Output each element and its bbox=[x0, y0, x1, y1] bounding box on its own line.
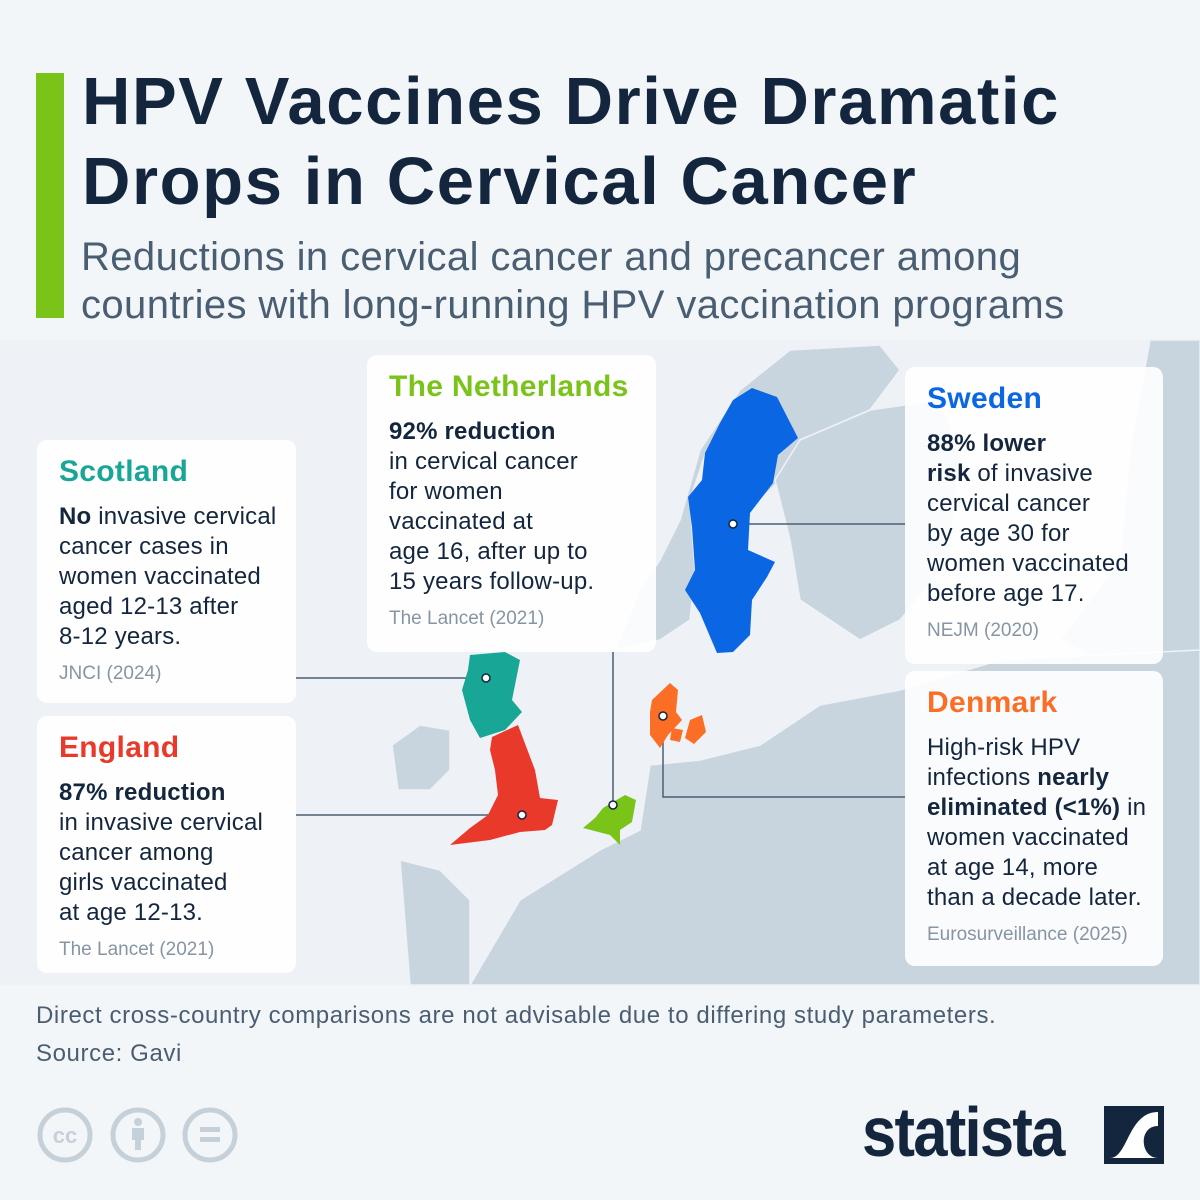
title accent bar bbox=[36, 73, 64, 318]
map: Scotland bbox=[462, 652, 522, 738]
panel: England: in invasive cervical bbox=[59, 809, 263, 836]
icons: license bbox=[38, 1108, 238, 1162]
panel: Netherlands: 92% reduction bbox=[389, 418, 556, 445]
panel: Netherlands: for women bbox=[389, 478, 503, 505]
panel: Scotland: aged 12-13 after bbox=[59, 593, 238, 620]
map: Denmark bbox=[650, 683, 706, 748]
panel: Denmark: than a decade later. bbox=[927, 884, 1142, 911]
logo: statista: statista bbox=[862, 1093, 1064, 1171]
panel: England: The Lancet (2021) bbox=[59, 939, 214, 960]
panel: Sweden: 88% lower bbox=[927, 430, 1046, 457]
panel: Scotland: JNCI (2024) bbox=[59, 663, 161, 684]
panel: England: cancer among bbox=[59, 839, 214, 866]
subtitle: Reductions in cervical cancer and precancer among bbox=[81, 235, 1021, 279]
panel: Sweden: Sweden bbox=[927, 382, 1042, 415]
panel: Sweden: by age 30 for bbox=[927, 520, 1070, 547]
logo: statista bbox=[862, 1093, 1164, 1171]
subtitle: countries with long-running HPV vaccination programs bbox=[81, 283, 1064, 327]
panel: England: 87% reduction bbox=[59, 779, 226, 806]
panel: Denmark: at age 14, more bbox=[927, 854, 1098, 881]
subtitle bbox=[81, 235, 1064, 327]
panel: Scotland: No invasive cervical bbox=[59, 503, 276, 530]
panel: Sweden: NEJM (2020) bbox=[927, 620, 1039, 641]
map: England bbox=[450, 725, 558, 845]
panel: Scotland: Scotland bbox=[59, 455, 188, 488]
panel: Sweden bbox=[905, 367, 1163, 664]
footnote: Direct cross-country comparisons are not advisable due to differing study parameters. bbox=[36, 1002, 996, 1029]
panel: Denmark: women vaccinated bbox=[927, 824, 1129, 851]
panel: Sweden: cervical cancer bbox=[927, 490, 1090, 517]
icons: license: cc bbox=[53, 1123, 77, 1148]
title: Drops in Cervical Cancer bbox=[82, 144, 917, 219]
panel: Netherlands: in cervical cancer bbox=[389, 448, 578, 475]
panel: Sweden: women vaccinated bbox=[927, 550, 1129, 577]
panel: Scotland: women vaccinated bbox=[59, 563, 261, 590]
footnote: Source: Gavi bbox=[36, 1040, 182, 1067]
panel: Scotland: 8-12 years. bbox=[59, 623, 181, 650]
panel: Denmark: Eurosurveillance (2025) bbox=[927, 924, 1128, 945]
connector lines bbox=[296, 524, 905, 815]
panel: Denmark: High-risk HPV bbox=[927, 734, 1080, 761]
panel: Denmark: infections nearly bbox=[927, 764, 1109, 791]
panel: Scotland bbox=[37, 440, 296, 703]
panel: England bbox=[37, 716, 296, 973]
panel: Netherlands: The Lancet (2021) bbox=[389, 608, 544, 629]
title: HPV Vaccines Drive Dramatic bbox=[82, 64, 1060, 139]
panel: Netherlands: vaccinated at bbox=[389, 508, 533, 535]
panel: Denmark bbox=[905, 671, 1163, 966]
panel: England: at age 12-13. bbox=[59, 899, 203, 926]
panel: Denmark: Denmark bbox=[927, 686, 1058, 719]
panel: England: girls vaccinated bbox=[59, 869, 228, 896]
panel: England: England bbox=[59, 731, 179, 764]
panel: Sweden: risk of invasive bbox=[927, 460, 1093, 487]
map: Sweden bbox=[685, 388, 798, 653]
panel: Scotland: cancer cases in bbox=[59, 533, 229, 560]
panel: Sweden: before age 17. bbox=[927, 580, 1085, 607]
panel: Netherlands: 15 years follow-up. bbox=[389, 568, 594, 595]
panel: Netherlands: The Netherlands bbox=[389, 370, 629, 403]
panel: Netherlands bbox=[367, 355, 656, 652]
map: Netherlands bbox=[583, 795, 636, 845]
panel: Denmark: eliminated (<1%) in bbox=[927, 794, 1146, 821]
panel: Netherlands: age 16, after up to bbox=[389, 538, 588, 565]
title bbox=[82, 64, 1060, 219]
footnote bbox=[36, 1002, 996, 1067]
